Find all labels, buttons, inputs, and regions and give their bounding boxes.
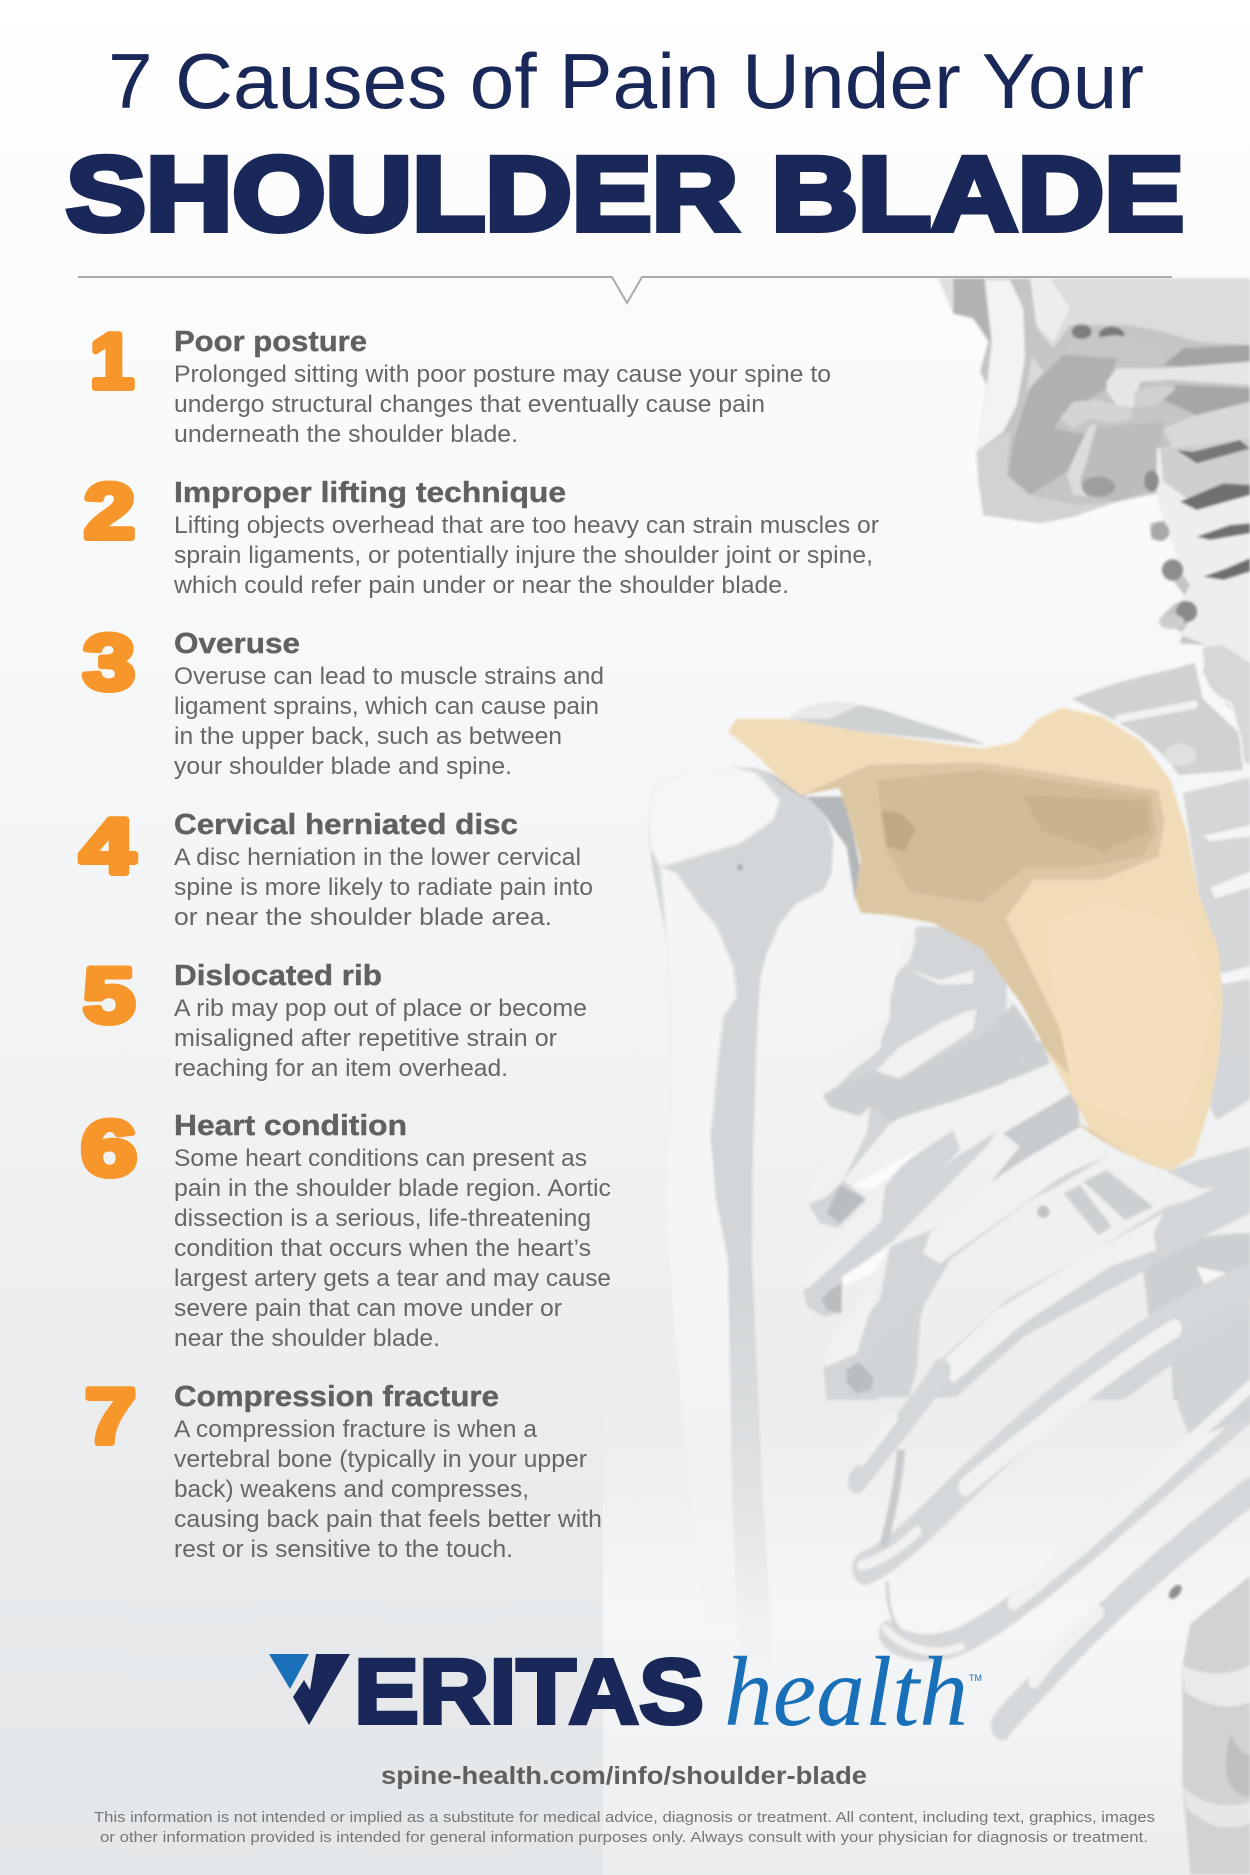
body: A compression fracture is when a bbox=[174, 1416, 538, 1443]
heading: Overuse bbox=[174, 628, 300, 660]
item 6: dissection is a serious, life-threatening bbox=[174, 1205, 591, 1232]
number 6: 6 bbox=[81, 1104, 137, 1192]
item 7: back) weakens and compresses, bbox=[174, 1476, 529, 1503]
item 3: your shoulder blade and spine. bbox=[174, 753, 512, 780]
skull and neck bbox=[938, 278, 1250, 675]
item 5: reaching for an item overhead. bbox=[174, 1055, 508, 1082]
number 5: 5 bbox=[83, 951, 135, 1039]
title line one: 7 Causes of Pain Under Your bbox=[108, 37, 1144, 125]
number 2: 2 bbox=[84, 467, 135, 555]
title line two: SHOULDER BLADE bbox=[66, 136, 1184, 253]
item 7 bbox=[85, 1372, 602, 1563]
item 2: sprain ligaments, or potentially injure the shoulder joint or spine, bbox=[174, 542, 873, 569]
heading: Heart condition bbox=[174, 1110, 407, 1142]
item 3: ligament sprains, which can cause pain bbox=[174, 693, 599, 720]
item 6 bbox=[81, 1104, 611, 1352]
number 4: 4 bbox=[80, 802, 135, 890]
illustration: skeleton bbox=[648, 278, 1250, 1875]
item 4 bbox=[80, 802, 593, 931]
body: Prolonged sitting with poor posture may cause your spine to bbox=[174, 361, 831, 388]
wordmark health: health bbox=[724, 1636, 968, 1747]
number 3: 3 bbox=[83, 618, 135, 706]
item 6: pain in the shoulder blade region. Aortic bbox=[174, 1175, 611, 1202]
item 1: underneath the shoulder blade. bbox=[174, 421, 518, 448]
ribs bbox=[802, 1000, 1250, 1400]
heading: Compression fracture bbox=[174, 1381, 499, 1413]
body: A disc herniation in the lower cervical bbox=[174, 844, 581, 871]
wordmark: ERITAS bbox=[354, 1641, 704, 1743]
item 4: or near the shoulder blade area. bbox=[174, 904, 552, 931]
body: Some heart conditions can present as bbox=[174, 1145, 587, 1172]
item 5 bbox=[83, 951, 587, 1082]
item 2 bbox=[84, 467, 879, 599]
clavicle and upper ribs bbox=[789, 645, 1250, 1060]
scapula highlighted bone bbox=[728, 708, 1223, 1171]
heading: Cervical herniated disc bbox=[174, 809, 518, 841]
item 6: largest artery gets a tear and may cause bbox=[174, 1265, 611, 1292]
number 7: 7 bbox=[85, 1372, 136, 1460]
title bbox=[66, 37, 1184, 253]
item 7: causing back pain that feels better with bbox=[174, 1506, 602, 1533]
disclaimer: or other information provided is intended for general information purposes only. Always consult with your physician for diagnosis or treatment. bbox=[100, 1829, 1148, 1846]
item 1: undergo structural changes that eventually cause pain bbox=[174, 391, 765, 418]
glenoid shadow bbox=[760, 768, 860, 900]
item 1 bbox=[90, 317, 831, 448]
heading: Dislocated rib bbox=[174, 960, 382, 992]
item 3 bbox=[83, 618, 604, 780]
item 4: spine is more likely to radiate pain into bbox=[174, 874, 593, 901]
item 6: severe pain that can move under or bbox=[174, 1295, 562, 1322]
item 7: vertebral bone (typically in your upper bbox=[174, 1446, 587, 1473]
item 7: rest or is sensitive to the touch. bbox=[174, 1536, 513, 1563]
divider with notch bbox=[78, 277, 1172, 303]
humerus bbox=[648, 767, 833, 1680]
body: Overuse can lead to muscle strains and bbox=[174, 663, 604, 690]
icon: logo V blue bbox=[269, 1654, 309, 1689]
heading: Poor posture bbox=[174, 326, 367, 358]
body: A rib may pop out of place or become bbox=[174, 995, 587, 1022]
heading: Improper lifting technique bbox=[174, 477, 566, 509]
item 6: condition that occurs when the heart’s bbox=[174, 1235, 591, 1262]
logo: Veritas Health bbox=[269, 1636, 982, 1747]
item 3: in the upper back, such as between bbox=[174, 723, 562, 750]
disclaimer bbox=[94, 1809, 1155, 1846]
icon: logo V navy bbox=[293, 1654, 350, 1725]
item 2: which could refer pain under or near the shoulder blade. bbox=[173, 572, 789, 599]
lighter image panel bbox=[603, 1400, 1250, 1875]
item 6: near the shoulder blade. bbox=[174, 1325, 440, 1352]
body: Lifting objects overhead that are too heavy can strain muscles or bbox=[174, 512, 879, 539]
item 5: misaligned after repetitive strain or bbox=[174, 1025, 557, 1052]
upper left rib pieces bbox=[823, 920, 1007, 1117]
trademark: TM bbox=[969, 1673, 982, 1683]
website url: spine-health.com/info/shoulder-blade bbox=[381, 1762, 867, 1790]
disclaimer: This information is not intended or implied as a substitute for medical advice, diagnosis or treatment. All content, including text, graphics, images bbox=[94, 1809, 1155, 1826]
lower ribs bbox=[857, 1281, 1250, 1875]
number 1: 1 bbox=[90, 317, 134, 405]
